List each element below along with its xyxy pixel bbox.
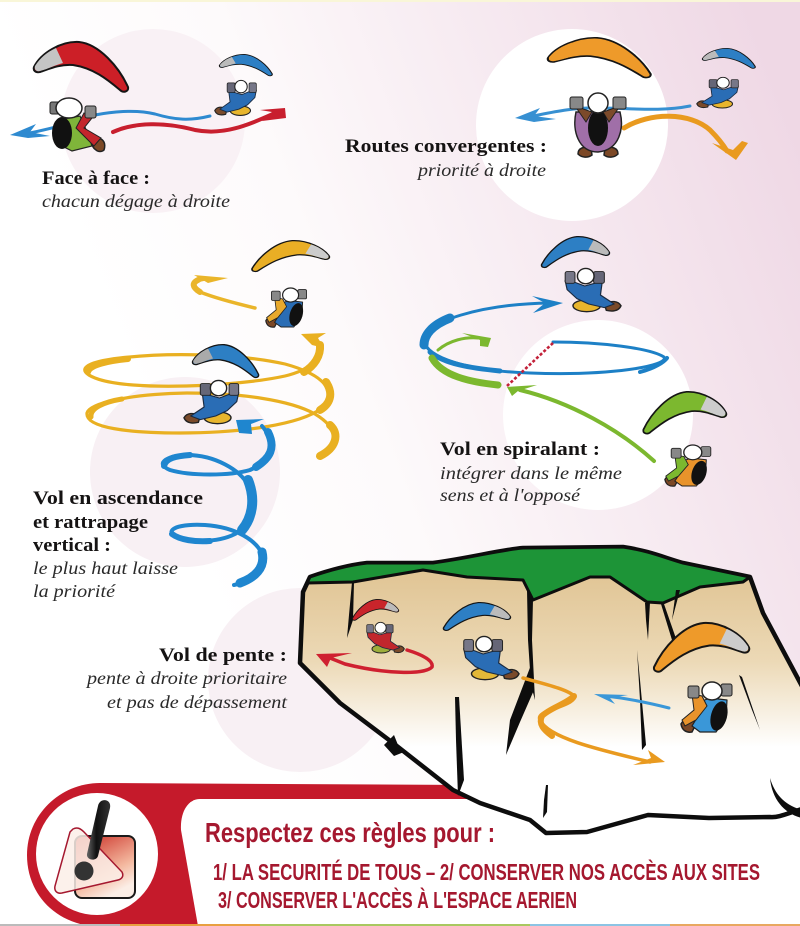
arrow: blue orbit (424, 296, 667, 374)
pilot: big blue (184, 380, 239, 424)
paraglider: orange on cliff (654, 623, 749, 672)
cliff grass (307, 547, 750, 603)
text: face à face: chacun dégage à droite (42, 191, 230, 211)
arrow: red face à face (113, 108, 286, 132)
text: ascendance: et rattrapage (33, 512, 148, 533)
paraglider: blue wing (193, 345, 259, 377)
scene: ascendance yellow spiral (85, 241, 335, 457)
paraglider: red wing (34, 42, 128, 92)
pilot: blue suit with pod (266, 288, 307, 327)
paraglider: orange wing (548, 38, 651, 78)
icon: warning (36, 793, 158, 915)
arrow: yellow coil (85, 333, 335, 457)
text: routes convergentes: priorité à droite (416, 160, 546, 180)
text: vol de pente: Vol de pente : (159, 645, 287, 666)
paraglider: small blue wing (219, 54, 272, 76)
text: ascendance: la priorité (33, 581, 116, 601)
arrow: blue slope (594, 694, 669, 708)
arrow: orange slope (523, 678, 665, 765)
icon exclamation ball (74, 862, 94, 880)
banner line 2: 3/ CONSERVER L'ACCÈS À L'ESPACE AERIEN (218, 886, 577, 913)
scene: routes convergentes (515, 38, 755, 160)
disc: face à face (61, 29, 245, 213)
text: ascendance (33, 488, 203, 601)
arrow: orange convergent (624, 116, 748, 160)
pilot: red on cliff (367, 622, 404, 653)
icon exclamation bar (87, 800, 110, 860)
arrow: red slope (316, 650, 432, 672)
pilot: small blue (215, 80, 256, 115)
scene: spiralant (424, 237, 726, 486)
paraglider: green wing (643, 392, 726, 434)
scene: ascendance blue spiral (163, 419, 272, 585)
top edge strip (0, 0, 800, 2)
disc: vol de pente (208, 588, 392, 772)
text: vol de pente: pente à droite prioritaire (85, 668, 287, 688)
paraglider: blue on cliff (443, 603, 510, 630)
pilot: small blue right (697, 77, 738, 108)
pilot: blue with pod on cliff (681, 682, 732, 733)
text: spiralant: intégrer dans le même (440, 463, 622, 483)
cliff (300, 547, 800, 833)
cliff rock body (300, 547, 800, 833)
text: vol de pente (85, 645, 288, 712)
text: routes convergentes (345, 136, 547, 180)
text: routes convergentes: Routes convergentes : (345, 136, 547, 157)
paraglider: red on cliff (352, 599, 399, 620)
icon rounded square (75, 836, 135, 898)
pilot: blue (565, 268, 621, 312)
icon tilted triangle (55, 828, 123, 893)
banner heading: Respectez ces règles pour : (205, 817, 495, 848)
icon white disc (36, 793, 158, 915)
scene: face à face (10, 42, 286, 152)
text: spiralant: Vol en spiralant : (440, 439, 600, 460)
arrow: blue face à face (10, 111, 210, 138)
text: ascendance: vertical : (33, 535, 111, 556)
text: ascendance: Vol en ascendance (33, 488, 203, 509)
paraglider: blue top wing (542, 237, 609, 267)
text: ascendance: le plus haut laisse (33, 558, 178, 578)
pilot: purple with pod (570, 93, 626, 157)
text: face à face: Face à face : (42, 168, 150, 189)
paraglider: small blue wing right (702, 48, 755, 68)
arrow: blue coil (163, 419, 272, 585)
banner red shape (27, 783, 500, 926)
disc: spiralant (503, 320, 693, 510)
pilot: green with pod (50, 98, 105, 152)
disc: routes convergentes (476, 29, 668, 221)
bottom colour strip (0, 924, 800, 926)
text: spiralant: sens et à l'opposé (440, 485, 581, 505)
disc: ascendance (90, 377, 280, 567)
paraglider: yellow wing (252, 241, 329, 271)
link: red dashed (507, 343, 553, 386)
text: vol de pente: et pas de dépassement (107, 692, 288, 712)
pilot: blue on cliff (464, 636, 519, 680)
text: face à face (42, 168, 230, 211)
text: spiralant (440, 439, 622, 505)
pilot: orange with pod (665, 445, 711, 486)
banner white panel (181, 799, 800, 926)
cliff cracks (347, 582, 800, 818)
arrow: blue convergent (515, 106, 690, 122)
arrow: green inner (432, 333, 498, 385)
arrow: yellow top (194, 275, 255, 308)
arrow: green outer (507, 385, 654, 461)
banner: red rules panel (27, 783, 800, 926)
